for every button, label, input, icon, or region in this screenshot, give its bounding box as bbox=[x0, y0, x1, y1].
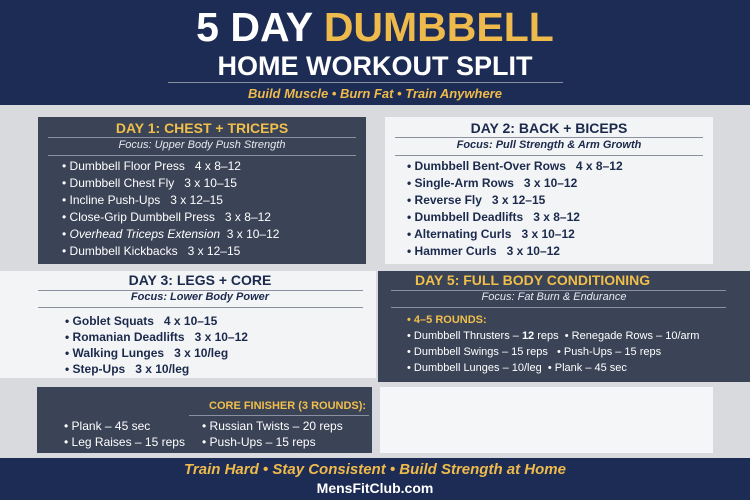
tagline: Build Muscle • Burn Fat • Train Anywhere bbox=[248, 86, 502, 101]
panel: day 5: Dumbbell Swings – 15 reps • Push-Ups – 15 reps bbox=[414, 346, 661, 358]
panel: day 5: DAY 5: FULL BODY CONDITIONING bbox=[415, 272, 650, 288]
panel: day 3: Goblet Squats 4 x 10–15 bbox=[73, 314, 217, 328]
panel: core finisher: Leg Raises – 15 reps bbox=[72, 435, 185, 449]
panel: core finisher: Plank – 45 sec bbox=[72, 419, 150, 433]
panel: day 3: Step-Ups 3 x 10/leg bbox=[73, 362, 189, 376]
panel: day 1: Incline Push-Ups 3 x 12–15 bbox=[70, 193, 223, 207]
panel: day 2 bbox=[385, 117, 713, 264]
footer bbox=[0, 458, 750, 500]
panel: day 2: Dumbbell Bent-Over Rows 4 x 8–12 bbox=[415, 159, 623, 173]
panel: day 3: Romanian Deadlifts 3 x 10–12 bbox=[73, 330, 248, 344]
panel: day 2: DAY 2: BACK + BICEPS bbox=[471, 120, 627, 136]
panel: day 2: Hammer Curls 3 x 10–12 bbox=[415, 244, 560, 258]
panel: core finisher: Russian Twists – 20 reps bbox=[210, 419, 343, 433]
empty panel bbox=[380, 387, 713, 453]
subtitle: HOME WORKOUT SPLIT bbox=[218, 51, 532, 81]
panel: day 5: Focus: Fat Burn & Endurance bbox=[482, 291, 626, 303]
panel: day 1: Overhead Triceps Extension 3 x 10–12 bbox=[70, 227, 279, 241]
panel: day 5: Dumbbell Thrusters – 12 reps • Renegade Rows – 10/arm bbox=[414, 330, 699, 342]
title: 5 DAY DUMBBELL bbox=[196, 4, 554, 50]
panel: day 3: Focus: Lower Body Power bbox=[131, 291, 269, 303]
panel: day 1: Dumbbell Kickbacks 3 x 12–15 bbox=[70, 244, 240, 258]
panel: day 2: Reverse Fly 3 x 12–15 bbox=[415, 193, 545, 207]
panel: core finisher bbox=[37, 387, 372, 453]
panel: day 3: DAY 3: LEGS + CORE bbox=[129, 272, 271, 288]
panel: core finisher: Push-Ups – 15 reps bbox=[210, 435, 316, 449]
panel: day 1: Focus: Upper Body Push Strength bbox=[119, 139, 285, 151]
panel: day 1: Dumbbell Floor Press 4 x 8–12 bbox=[70, 159, 241, 173]
panel: day 3: Walking Lunges 3 x 10/leg bbox=[73, 346, 228, 360]
panel: day 2: Dumbbell Deadlifts 3 x 8–12 bbox=[415, 210, 580, 224]
panel: day 1: Dumbbell Chest Fly 3 x 10–15 bbox=[70, 176, 237, 190]
panel: day 2: Single-Arm Rows 3 x 10–12 bbox=[415, 176, 577, 190]
panel: day 5: Dumbbell Lunges – 10/leg • Plank – 45 sec bbox=[414, 362, 627, 374]
footer slogan: Train Hard • Stay Consistent • Build Strength at Home bbox=[184, 461, 566, 478]
panel: day 3 bbox=[0, 271, 376, 378]
header bbox=[0, 0, 750, 105]
panel: day 5 bbox=[378, 271, 750, 382]
panel: day 5: 4–5 ROUNDS: bbox=[414, 314, 487, 326]
panel: day 1: DAY 1: CHEST + TRICEPS bbox=[116, 120, 288, 136]
panel: core finisher: CORE FINISHER (3 ROUNDS): bbox=[209, 400, 366, 412]
panel: day 2: Alternating Curls 3 x 10–12 bbox=[414, 227, 575, 241]
panel: day 1: Close-Grip Dumbbell Press 3 x 8–12 bbox=[70, 210, 271, 224]
panel: day 1 bbox=[38, 117, 366, 264]
panel: day 2: Focus: Pull Strength & Arm Growth bbox=[457, 139, 641, 151]
footer site: MensFitClub.com bbox=[317, 480, 433, 496]
